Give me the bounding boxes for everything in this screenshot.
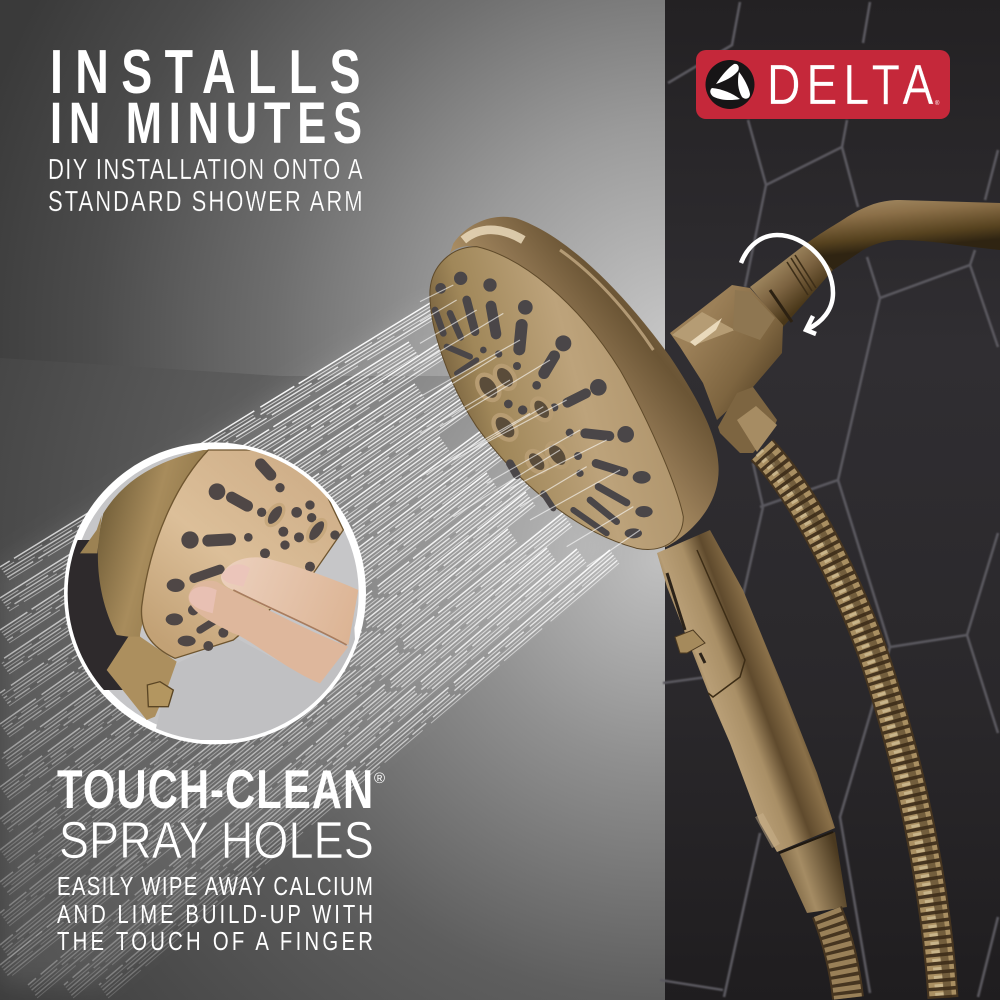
water spray [0,300,619,998]
panel: dark hexagon tile wall [660,0,1000,1000]
heading: installs in minutes: INSTALLS [50,36,361,107]
heading: Touch-Clean spray holes: ® [374,770,385,787]
inset handle clip [147,682,173,707]
inset head back [98,450,208,638]
text: Touch-Clean description: AND LIME BUILD-UP WITH [57,900,373,929]
inset handle neck [107,637,177,720]
rim highlight [560,250,653,350]
inset spray holes [166,483,340,651]
heading: installs in minutes: IN MINUTES [50,91,362,155]
logo: Delta badge [696,50,950,119]
heading: installs in minutes [50,36,362,155]
handle seam [697,550,745,697]
text: Touch-Clean description: EASILY WIPE AWAY CALCIUM [57,872,373,901]
handle neck [780,832,847,913]
hose from mount to bottom [759,450,948,998]
lower hose [827,912,848,998]
hose nut [718,387,777,453]
recessed nozzle rings [473,362,572,476]
rotation arrow [741,235,833,334]
inset head face [141,450,343,658]
fingernails [222,564,239,584]
spray holes [435,272,653,538]
text: Touch-Clean description [57,872,373,956]
background: shower wall upper [0,0,668,376]
head rim [450,217,719,549]
inset circle: finger wiping spray holes [67,446,362,741]
text: DIY subheading: DIY INSTALLATION ONTO A [48,154,363,186]
water jets over the face [420,285,640,567]
swivel mount [670,285,783,420]
threaded neck [750,243,833,327]
heading: Touch-Clean spray holes: TOUCH-CLEAN [57,760,373,820]
text: DIY subheading [48,154,363,218]
heading: Touch-Clean spray holes: SPRAY HOLES [59,812,374,870]
text: Touch-Clean description: THE TOUCH OF A FINGER [57,927,373,956]
handle slot [667,573,705,663]
shower head, drawn in 3x crop coordinates [420,217,719,567]
registered mark: ® [935,100,940,107]
logo wordmark: DELTA [767,53,934,116]
dark wall in inset [67,540,130,690]
spray hole capsules [435,300,627,533]
hand shower handle [657,530,848,998]
lower grey wall [156,628,355,740]
head face [430,247,683,549]
handle button [675,630,705,653]
shower arm [807,200,1000,270]
text: DIY subheading: STANDARD SHOWER ARM [48,186,363,218]
handle band highlight [759,815,776,846]
heading: Touch-Clean spray holes [57,760,385,870]
logo mark [706,60,754,109]
background: shower wall lower [0,358,668,1000]
lower finger [188,581,348,683]
upper finger [221,557,358,645]
finger crease [233,590,347,645]
inset nozzle rings [264,503,328,544]
